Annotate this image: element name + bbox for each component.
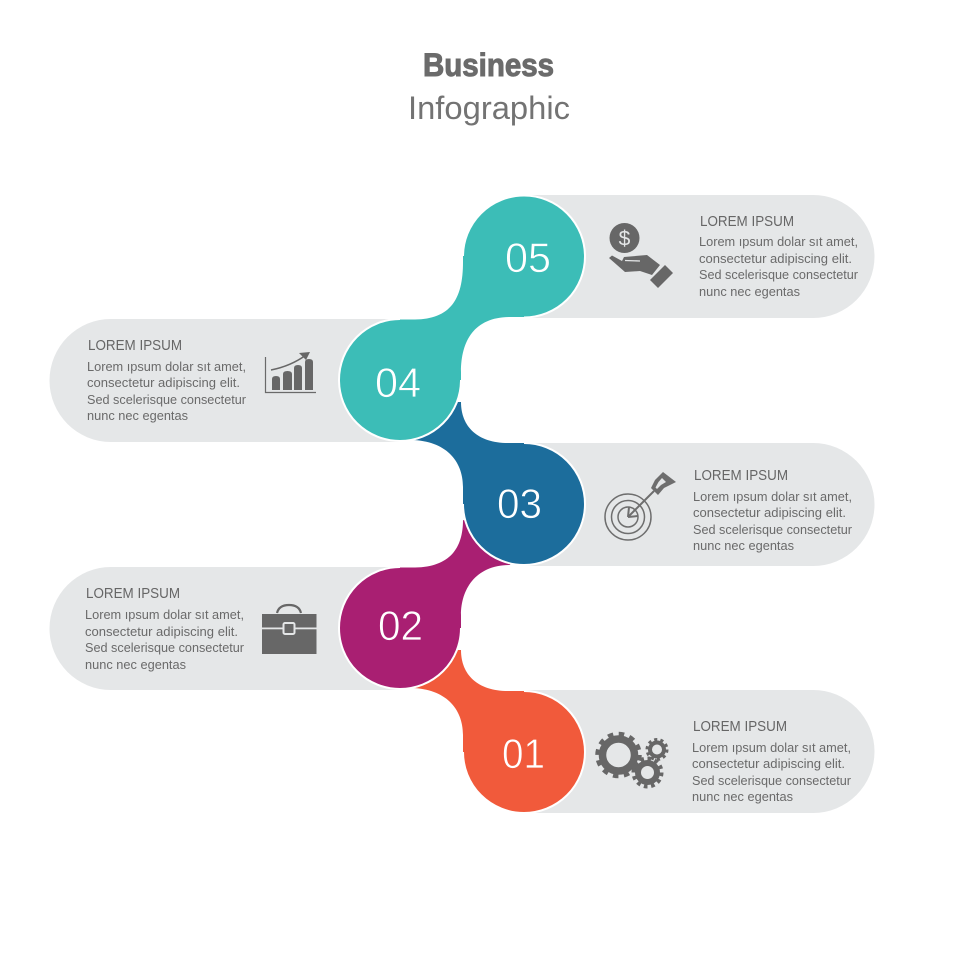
number 03: 03 bbox=[497, 480, 542, 527]
text: step 05: LOREM IPSUM bbox=[700, 214, 794, 230]
text: step 01: Sed scelerisque consectetur bbox=[692, 773, 852, 788]
node: step 01 bbox=[463, 691, 585, 813]
text: step 05: Sed scelerisque consectetur bbox=[699, 267, 859, 282]
text: step 05: consectetur adipiscing elit. bbox=[699, 251, 852, 266]
text: step 03: nunc nec egentas bbox=[693, 538, 794, 553]
text: step 04: Sed scelerisque consectetur bbox=[87, 392, 247, 407]
node: step 04 bbox=[339, 319, 461, 441]
text: step 05: Lorem ıpsum dolar sıt amet, bbox=[699, 234, 858, 249]
text: step 02: nunc nec egentas bbox=[85, 657, 186, 672]
text: step 04: LOREM IPSUM bbox=[88, 338, 182, 354]
text: step 02: Sed scelerisque consectetur bbox=[85, 640, 245, 655]
text: step 02 bbox=[85, 586, 245, 672]
text: step 01: nunc nec egentas bbox=[692, 789, 793, 804]
title: Business bbox=[423, 47, 554, 83]
icon: briefcase bbox=[262, 605, 316, 654]
connector: 05 to 04 bbox=[400, 256, 524, 380]
connector: 03 to 02 bbox=[400, 520, 524, 628]
text: step 05: nunc nec egentas bbox=[699, 284, 800, 299]
connector: 04 to 03 bbox=[400, 402, 524, 504]
text: step 01: LOREM IPSUM bbox=[693, 719, 787, 735]
icon: growth chart bbox=[266, 352, 316, 392]
icon: target with arrow bbox=[605, 472, 676, 540]
text: step 04: nunc nec egentas bbox=[87, 408, 188, 423]
text: step 04: Lorem ıpsum dolar sıt amet, bbox=[87, 359, 246, 374]
text: step 03: LOREM IPSUM bbox=[694, 468, 788, 484]
panel: step 01 bar bbox=[524, 690, 874, 813]
icon: hand holding coin bbox=[609, 223, 673, 288]
text: step 01: consectetur adipiscing elit. bbox=[692, 756, 845, 771]
panel: step 04 bar bbox=[49, 319, 400, 442]
text: step 03: consectetur adipiscing elit. bbox=[693, 505, 846, 520]
number 05: 05 bbox=[505, 234, 551, 281]
text: step 03: Lorem ıpsum dolar sıt amet, bbox=[693, 489, 852, 504]
text: step 04 bbox=[87, 338, 247, 423]
text: step 02: Lorem ıpsum dolar sıt amet, bbox=[85, 607, 244, 622]
text: step 03 bbox=[693, 468, 853, 553]
text: step 04: consectetur adipiscing elit. bbox=[87, 375, 240, 390]
panel: step 03 bar bbox=[524, 443, 874, 566]
node: step 05 bbox=[463, 196, 585, 318]
text: step 03: Sed scelerisque consectetur bbox=[693, 522, 853, 537]
number 04: 04 bbox=[375, 359, 421, 406]
node: step 02 bbox=[339, 567, 461, 689]
text: step 01: Lorem ıpsum dolar sıt amet, bbox=[692, 740, 851, 755]
text: step 02: consectetur adipiscing elit. bbox=[85, 624, 238, 639]
icon: gears bbox=[598, 734, 667, 786]
panel: step 05 bar bbox=[524, 195, 874, 318]
text: step 05 bbox=[699, 214, 859, 299]
text: step 02: LOREM IPSUM bbox=[86, 586, 180, 602]
title: Infographic bbox=[408, 90, 570, 126]
connector: 02 to 01 bbox=[400, 650, 524, 752]
number 02: 02 bbox=[378, 602, 423, 649]
panel: step 02 bar bbox=[49, 567, 400, 690]
text: step 01 bbox=[692, 719, 852, 804]
title bbox=[408, 47, 570, 126]
node: step 03 bbox=[463, 443, 585, 565]
icon: hand holding coin: $ bbox=[619, 228, 631, 250]
number 01: 01 bbox=[502, 730, 545, 777]
